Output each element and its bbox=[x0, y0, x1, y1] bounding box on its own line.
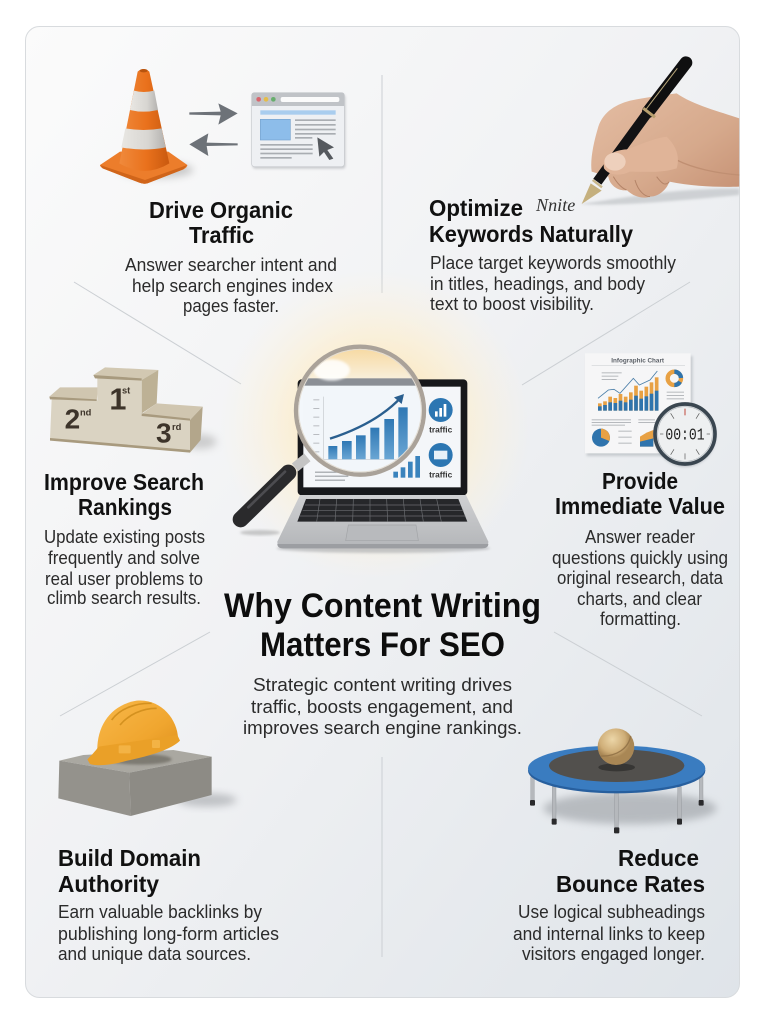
body text: Answer searcher intent and bbox=[125, 254, 337, 275]
body text: and unique data sources. bbox=[58, 943, 251, 964]
icon: chart sheet and stopwatch: Infographic Chart bbox=[611, 357, 665, 364]
place numbers bbox=[65, 382, 182, 448]
place numbers: rd bbox=[172, 422, 182, 432]
heading bbox=[149, 197, 293, 248]
icon: podium bbox=[49, 367, 217, 453]
section: central hero bbox=[224, 345, 541, 738]
heading: Rankings bbox=[78, 494, 172, 520]
donut chart bbox=[668, 372, 681, 385]
body text: Use logical subheadings bbox=[518, 901, 705, 922]
body text: help search engines index bbox=[132, 275, 334, 296]
section: drive organic traffic bbox=[100, 69, 345, 316]
pie chart bbox=[592, 429, 610, 447]
body text: questions quickly using bbox=[552, 547, 728, 568]
body text bbox=[552, 526, 728, 629]
body text bbox=[125, 254, 337, 316]
body text: Update existing posts bbox=[44, 526, 205, 547]
heading: Traffic bbox=[189, 222, 254, 248]
heading bbox=[429, 195, 633, 247]
place numbers: nd bbox=[80, 408, 92, 418]
subtitle: traffic, boosts engagement, and bbox=[251, 696, 513, 717]
subtitle bbox=[243, 674, 522, 738]
signature: Nnite bbox=[535, 195, 575, 215]
section: optimize keywords naturally bbox=[429, 63, 739, 314]
body text bbox=[430, 252, 677, 314]
lens bar chart bbox=[328, 407, 408, 459]
heading bbox=[556, 845, 705, 897]
heading: Keywords Naturally bbox=[429, 221, 633, 247]
body text: publishing long-form articles bbox=[58, 923, 279, 944]
heading: Optimize bbox=[429, 195, 523, 221]
stopwatch: 00:01 bbox=[665, 426, 705, 445]
icon: traffic cone with arrows and browser bbox=[100, 69, 345, 184]
body text: visitors engaged longer. bbox=[522, 943, 705, 964]
hard hat bbox=[87, 700, 180, 765]
heading bbox=[58, 845, 201, 897]
body text bbox=[44, 526, 205, 608]
place numbers: 1 bbox=[109, 382, 126, 416]
heading: Bounce Rates bbox=[556, 871, 705, 897]
pen bbox=[582, 63, 686, 204]
body text: frequently and solve bbox=[48, 547, 200, 568]
section: reduce bounce rates bbox=[513, 728, 717, 964]
body text bbox=[513, 901, 705, 964]
icon: ball on trampoline bbox=[528, 728, 717, 833]
heading: Provide bbox=[602, 468, 678, 494]
body text: original research, data bbox=[557, 567, 724, 588]
body text: pages faster. bbox=[183, 295, 279, 316]
section: provide immediate value bbox=[552, 353, 728, 629]
heading bbox=[44, 469, 204, 520]
place numbers: 2 bbox=[65, 403, 80, 434]
body text: charts, and clear bbox=[577, 588, 702, 609]
place numbers: 3 bbox=[156, 417, 172, 448]
body text: and internal links to keep bbox=[513, 923, 705, 944]
stacked bars bbox=[598, 371, 658, 411]
subtitle: Strategic content writing drives bbox=[253, 674, 512, 695]
browser window bbox=[252, 93, 345, 169]
arrow: to cone bbox=[189, 133, 238, 156]
heading: Immediate Value bbox=[555, 493, 725, 519]
illustration: laptop with magnifying glass bbox=[240, 345, 490, 553]
magnifying glass bbox=[241, 345, 427, 519]
body text: climb search results. bbox=[47, 587, 201, 608]
body text: text to boost visibility. bbox=[430, 293, 594, 314]
body text: Earn valuable backlinks by bbox=[58, 901, 263, 922]
icon: hand writing with fountain pen bbox=[535, 63, 739, 215]
icon: chart sheet and stopwatch bbox=[585, 353, 716, 467]
section: improve search rankings bbox=[44, 367, 217, 608]
heading: Improve Search bbox=[44, 469, 204, 495]
body text bbox=[58, 901, 279, 964]
title: Matters For SEO bbox=[260, 626, 505, 664]
section: build domain authority bbox=[58, 700, 279, 964]
body text: formatting. bbox=[600, 608, 681, 629]
laptop screen: traffic bbox=[429, 469, 453, 479]
warm glow bbox=[220, 270, 530, 580]
laptop base bbox=[277, 495, 488, 548]
body text: in titles, headings, and body bbox=[430, 273, 646, 294]
heading: Drive Organic bbox=[149, 197, 293, 223]
icon: hard hat on concrete block bbox=[58, 700, 237, 816]
body text: Place target keywords smoothly bbox=[430, 252, 677, 273]
title bbox=[224, 587, 541, 664]
place numbers: st bbox=[122, 385, 130, 395]
body text: real user problems to bbox=[45, 568, 203, 589]
laptop screen: traffic bbox=[429, 425, 453, 435]
body text: Answer reader bbox=[585, 526, 695, 547]
laptop screen bbox=[298, 379, 467, 495]
heading: Build Domain bbox=[58, 845, 201, 871]
arrow: to browser bbox=[189, 103, 238, 125]
heading: Reduce bbox=[618, 845, 699, 871]
heading: Authority bbox=[58, 871, 159, 897]
ball bbox=[598, 728, 634, 765]
heading bbox=[555, 468, 725, 519]
title: Why Content Writing bbox=[224, 587, 541, 625]
subtitle: improves search engine rankings. bbox=[243, 717, 522, 738]
